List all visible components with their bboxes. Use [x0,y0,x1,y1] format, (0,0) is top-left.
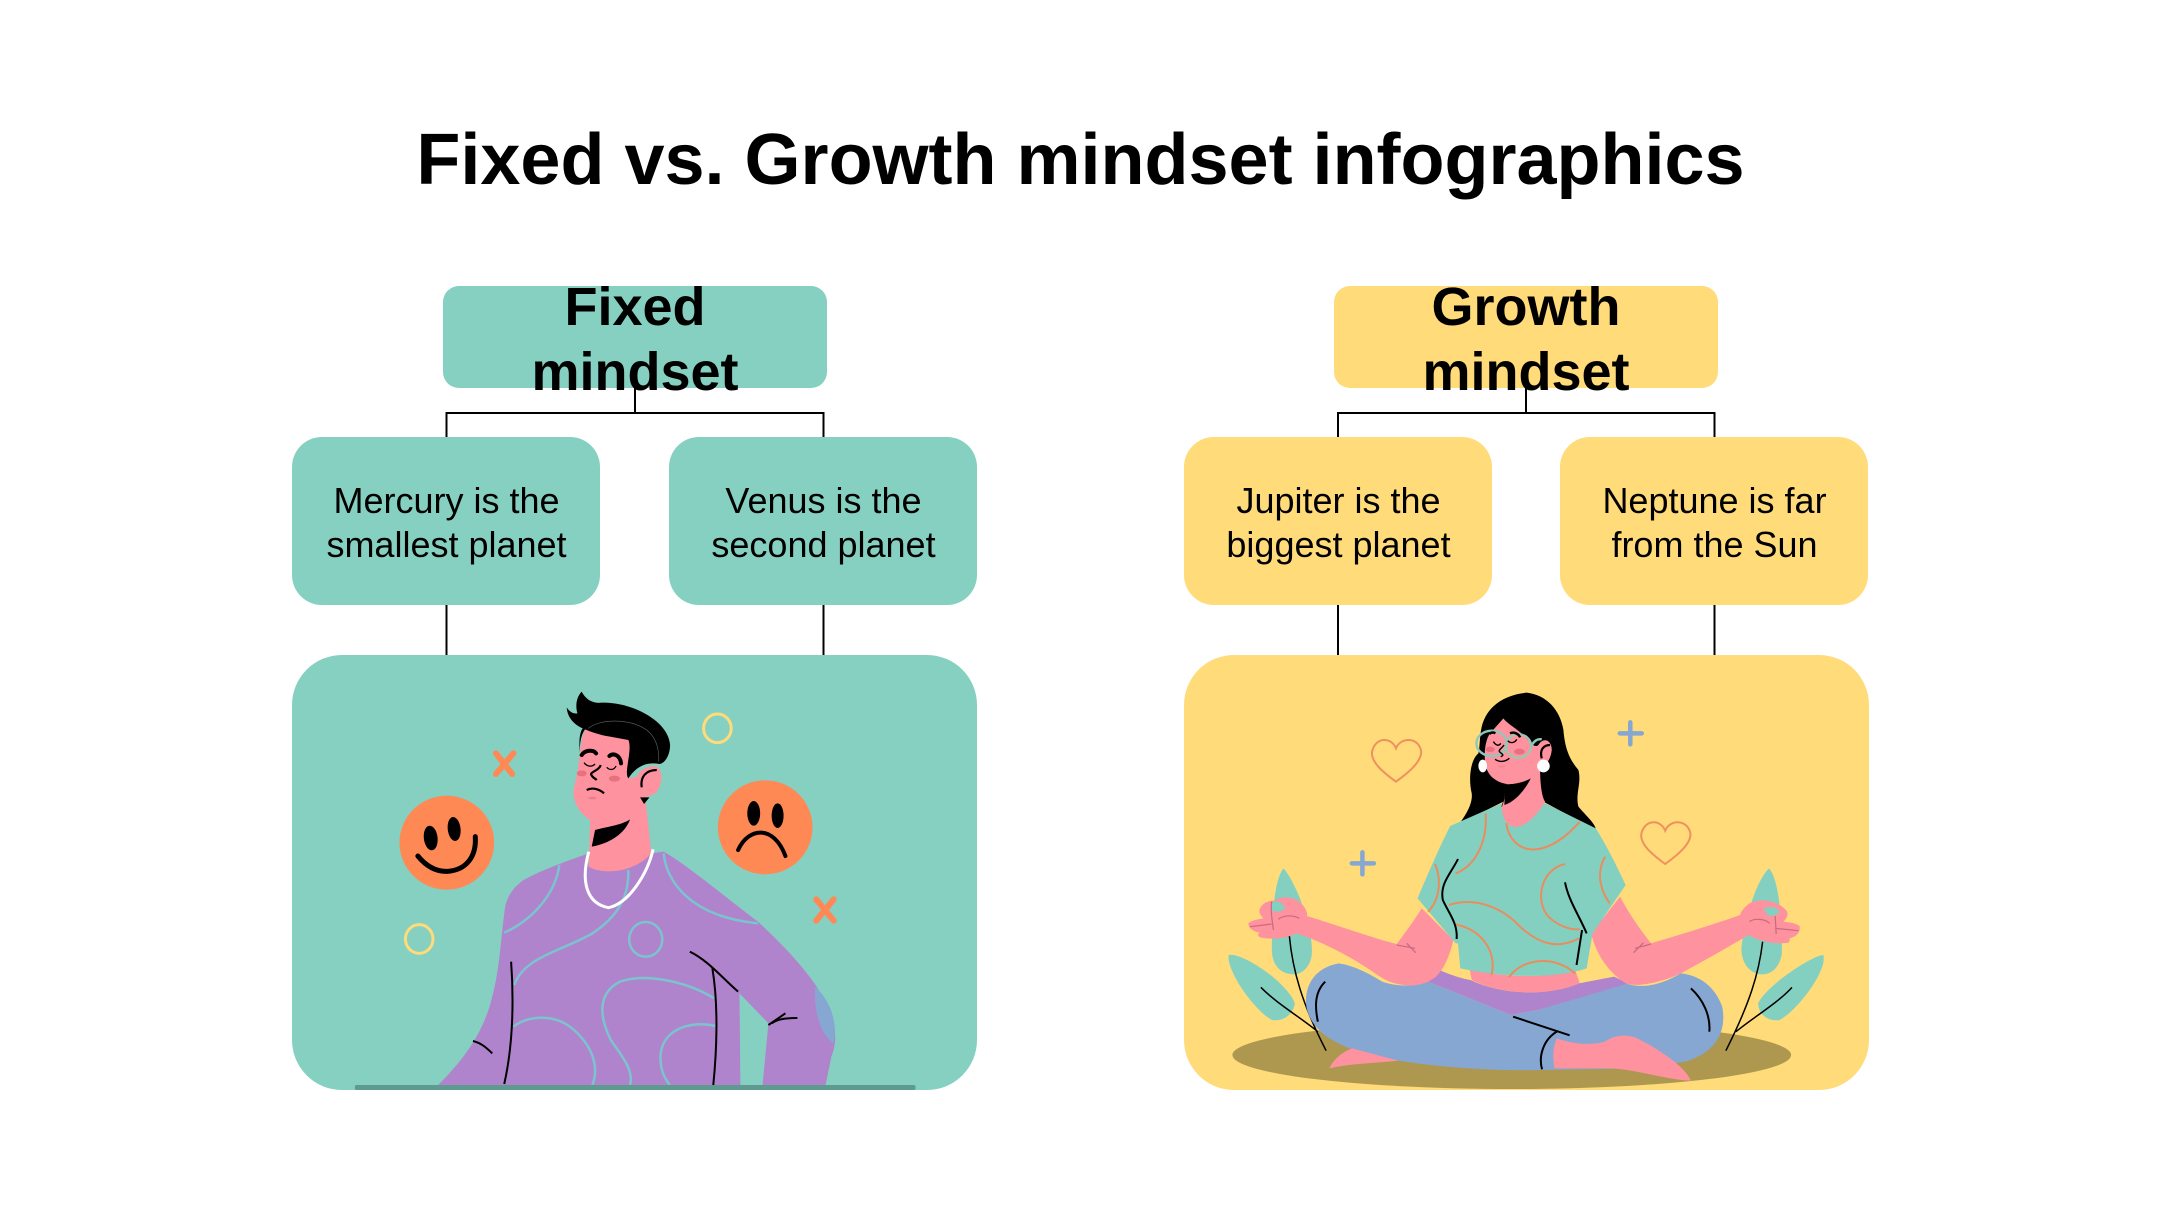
illustration: plants [1229,868,1824,1051]
heading: growth mindset: mindset [1422,342,1630,402]
ground shadow [1232,1021,1791,1089]
title: Fixed vs. Growth mindset infographics [416,120,1745,200]
icon: sad face [718,780,813,874]
heading: fixed mindset: mindset [531,342,739,402]
heading: fixed mindset [531,277,739,402]
panel: Neptune: Neptune is far [1602,480,1827,520]
illustration: man [355,692,915,1090]
panel: Mercury [292,437,600,605]
panel: fixed mindset illustration [292,655,977,1090]
panel: growth mindset heading box [1334,286,1718,388]
panel: fixed mindset heading box [443,286,827,388]
icon: smiling face [399,796,494,890]
heading: growth mindset: Growth [1432,277,1620,337]
illustration: meditating woman [1248,693,1800,1081]
panel: Jupiter [1184,437,1492,605]
icon: crosses and rings [405,714,834,953]
panel: Mercury: smallest planet [326,524,567,564]
panel: Venus: Venus is the [725,480,922,520]
panel: growth mindset illustration [1184,655,1868,1090]
panel: Venus [669,437,977,605]
panel: Venus: second planet [711,524,936,564]
panel: Neptune [1560,437,1868,605]
heading: fixed mindset: Fixed [564,277,706,337]
icon: hearts and plus signs [1352,722,1690,874]
heading: growth mindset [1422,277,1630,402]
panel: Mercury: Mercury is the [333,480,560,520]
panel: Neptune: from the Sun [1611,524,1818,564]
panel: Jupiter: biggest planet [1226,524,1451,564]
panel: Jupiter: Jupiter is the [1236,480,1441,520]
